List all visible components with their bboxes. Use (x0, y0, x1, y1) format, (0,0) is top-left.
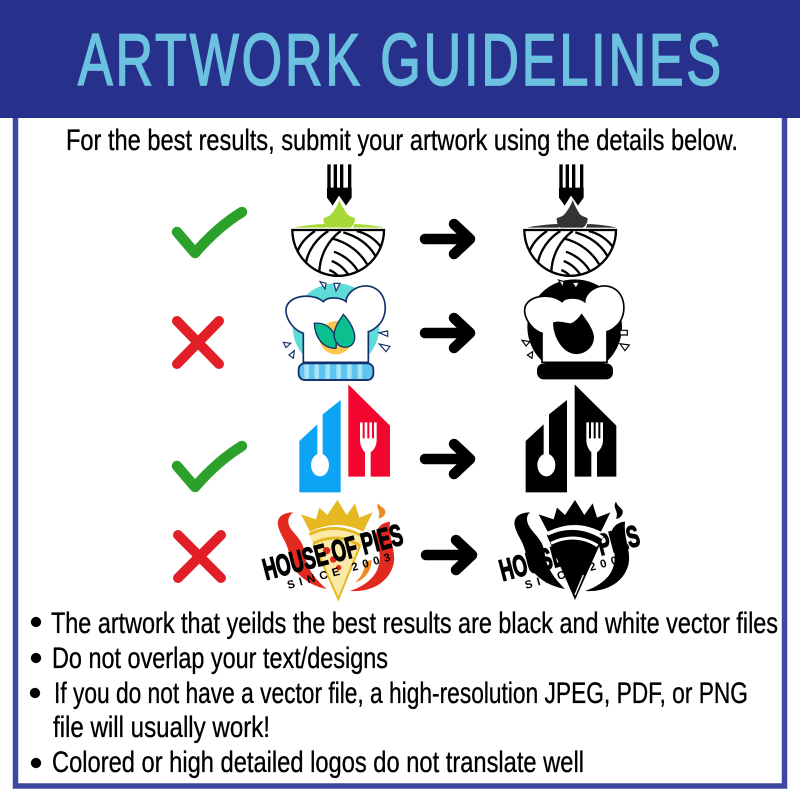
logo: house in black (526, 384, 616, 492)
arrow row 1 (425, 224, 470, 254)
icon: green check row 1 (177, 212, 242, 253)
header banner (0, 0, 800, 118)
logo: chef hat in black (522, 279, 629, 379)
logo: House of Pies in colour: SINCE 2003 (286, 552, 392, 592)
arrow row 2 (425, 318, 470, 348)
logo: bowl and fork in black (524, 164, 617, 280)
logo: House of Pies in colour (259, 500, 406, 600)
logo: chef hat in colour (283, 282, 390, 380)
bullet list: file will usually work! (53, 711, 270, 744)
icon: green check row 3 (177, 446, 242, 487)
logo: House of Pies in black: SINCE 2003 (524, 552, 630, 592)
logo: House of Pies in black: HOUSE OF PIES (496, 520, 643, 588)
bullet list: Do not overlap your text/designs (52, 642, 388, 675)
icon: red cross row 4 (178, 535, 221, 578)
arrow row 3 (425, 444, 470, 474)
arrow row 4 (426, 540, 472, 570)
logo: House of Pies in black (496, 500, 643, 600)
logo: House of Pies in colour: HOUSE OF PIES (259, 519, 406, 587)
logo: blue and red house in colour (299, 384, 390, 492)
bullet list: Colored or high detailed logos do not translate well (52, 746, 584, 779)
bullet list (30, 607, 778, 779)
logo: bowl and fork in colour (292, 164, 384, 280)
icon: red cross row 2 (177, 321, 219, 364)
